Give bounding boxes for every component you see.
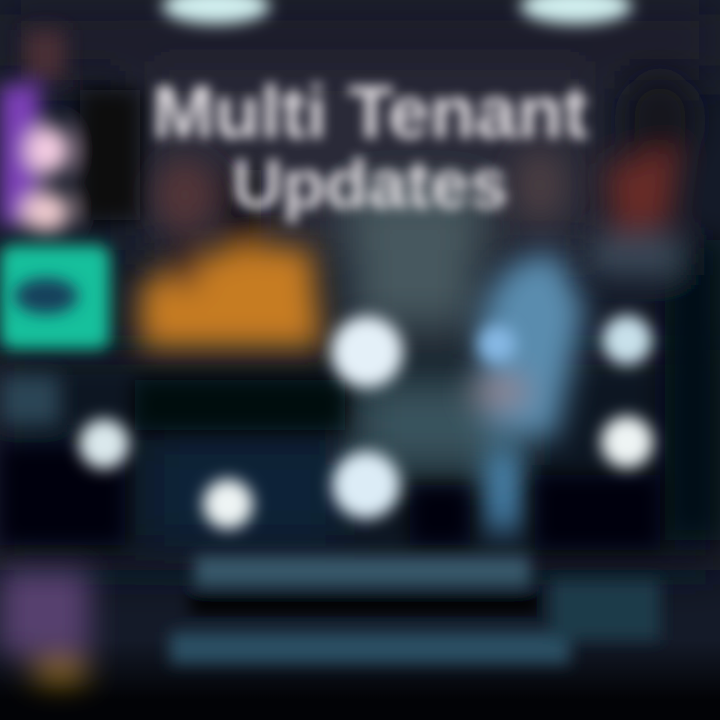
green badge <box>0 245 110 349</box>
ceiling lights <box>162 0 632 24</box>
figure in red and dark right side <box>590 76 720 540</box>
lower-left purple glow <box>0 570 90 682</box>
title line 2: Updates <box>232 145 508 223</box>
purple panel at left <box>0 30 140 232</box>
background tones <box>0 0 720 570</box>
figure in blue <box>470 149 585 530</box>
title line 1: Multi Tenant <box>152 70 588 154</box>
dark chairs <box>0 375 660 550</box>
table <box>170 556 660 664</box>
glowing icon circles <box>79 315 653 529</box>
figure in orange <box>140 159 322 348</box>
